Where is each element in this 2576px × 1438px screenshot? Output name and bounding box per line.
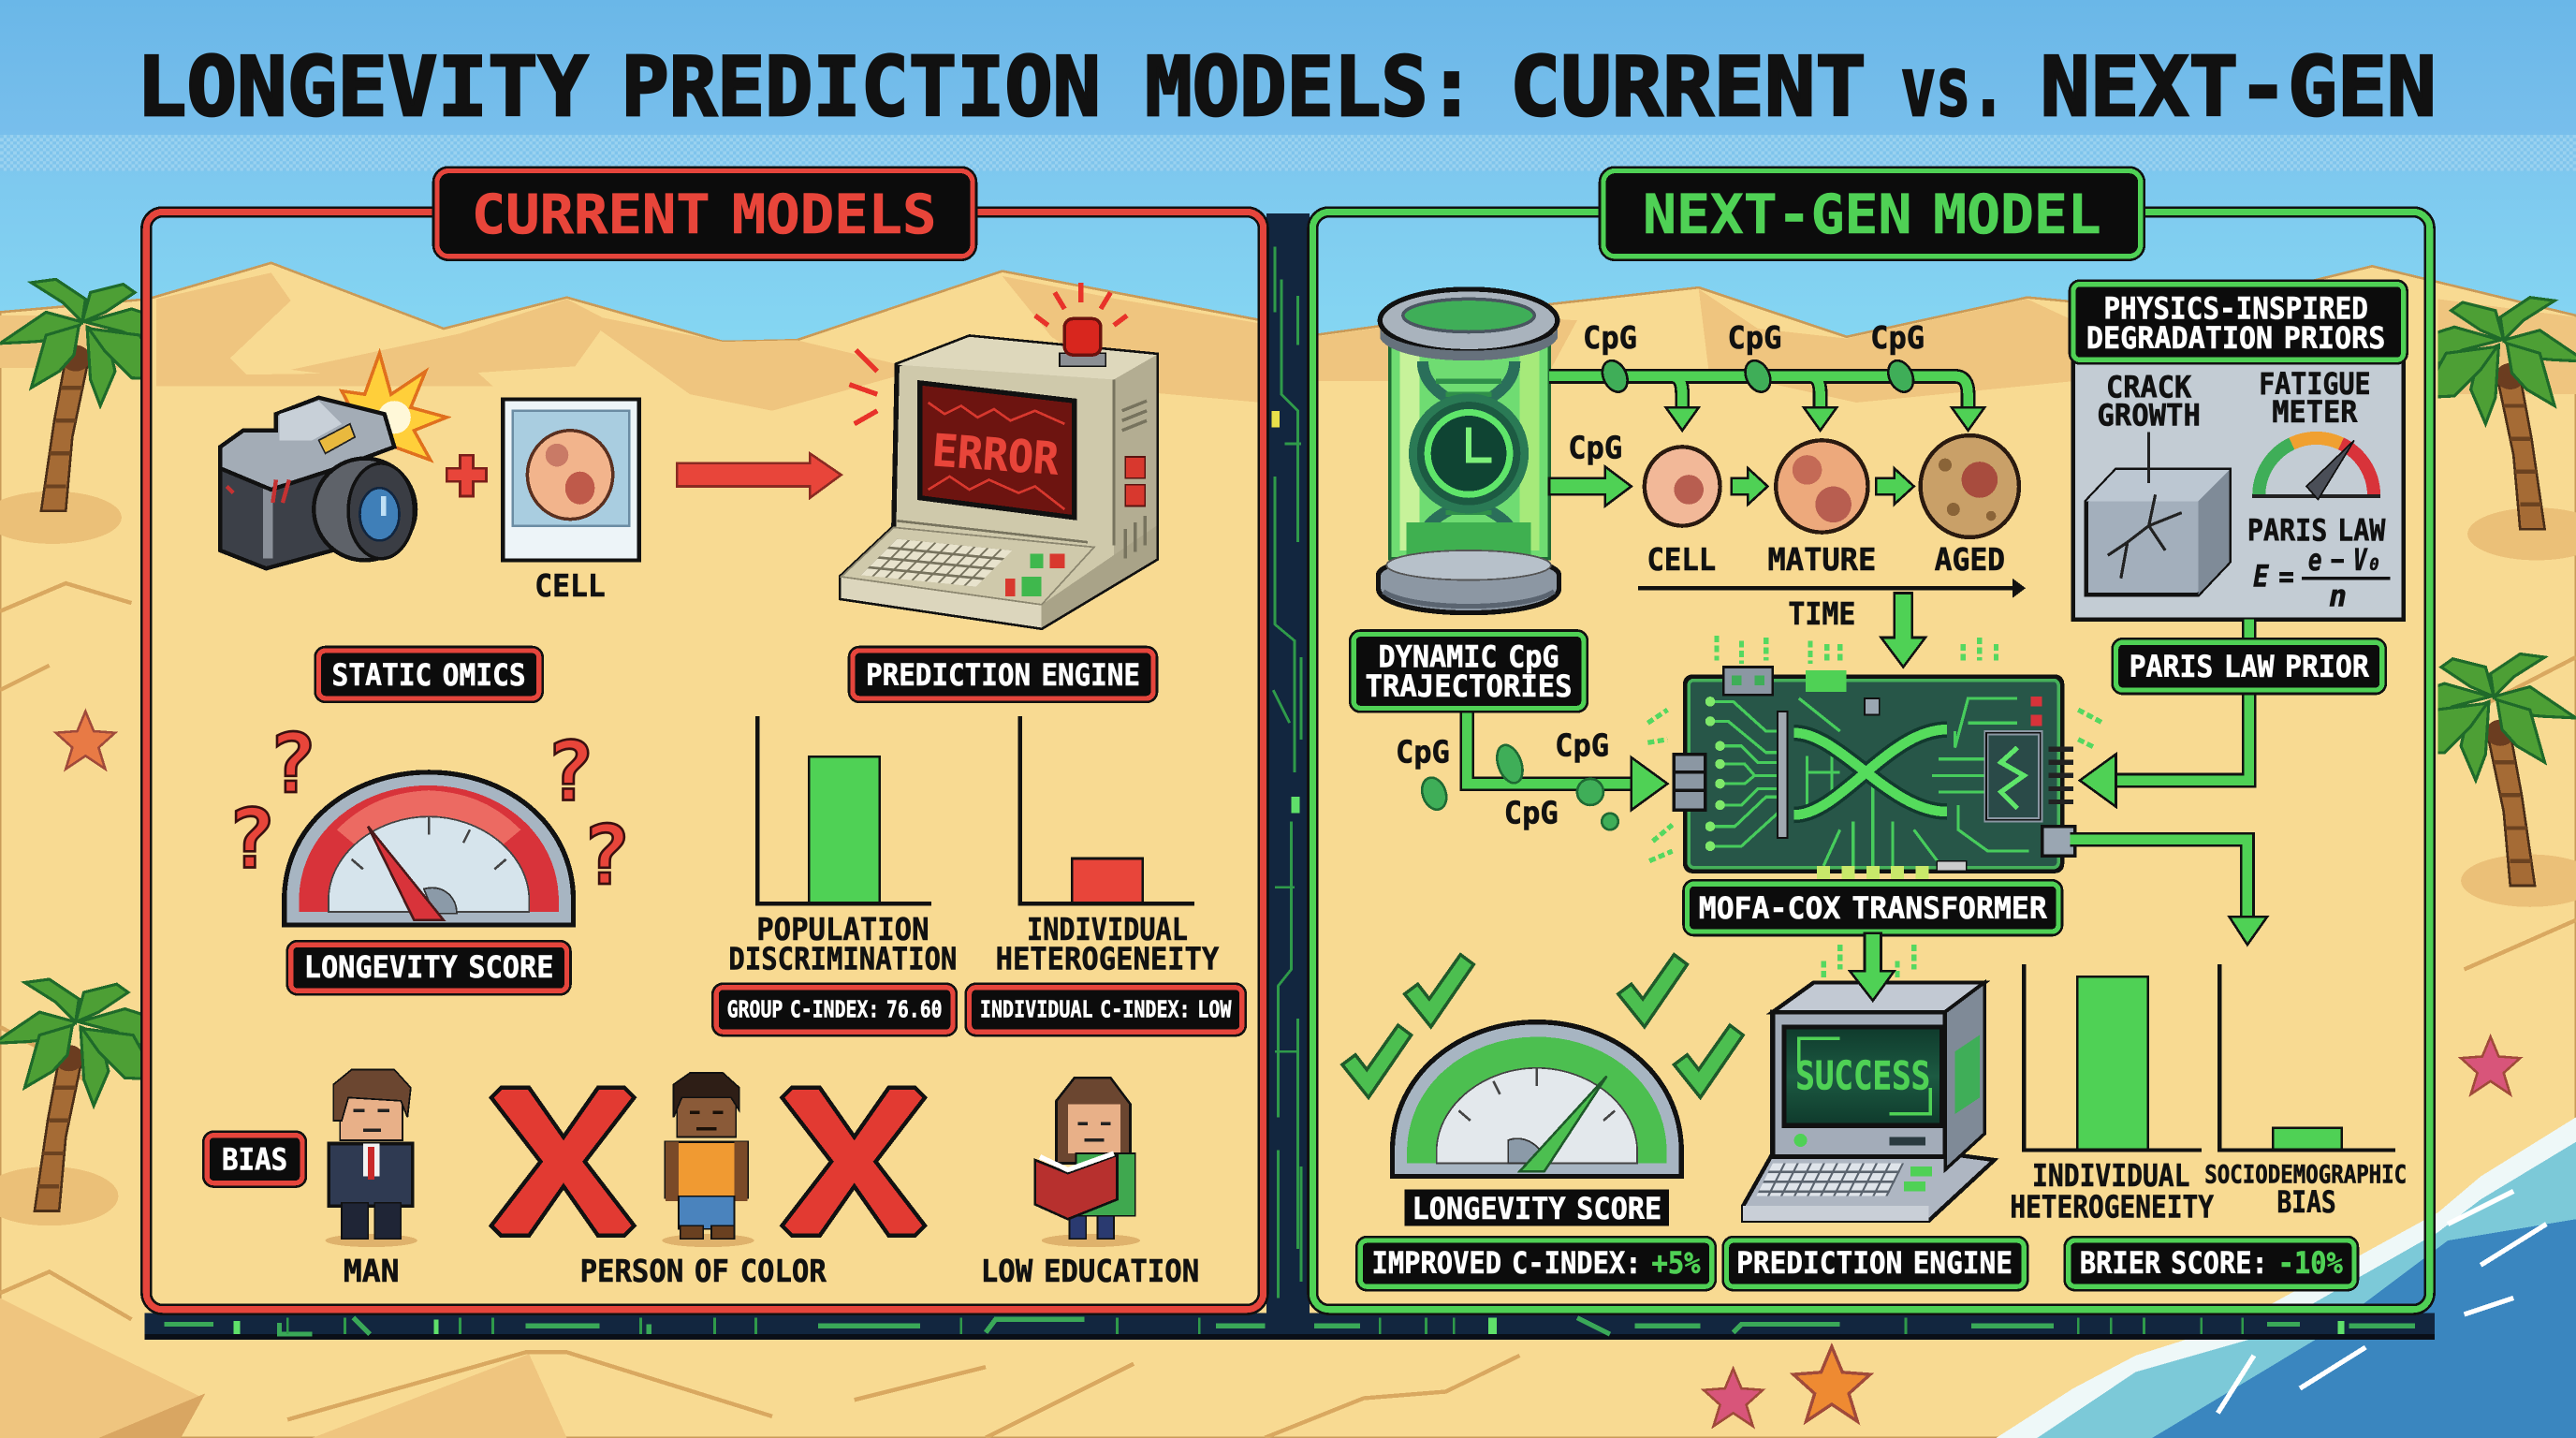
formula: paris law: E = [2253, 561, 2294, 594]
heading: next-gen model: NEXT-GEN MODEL [1643, 183, 2101, 246]
label: longevity score: LONGEVITY SCORE [304, 951, 554, 985]
bar chart: sociodemographic bias [2204, 964, 2407, 1220]
panel: physics-inspired degradation priors [2073, 285, 2404, 620]
heading: next-gen model [1603, 171, 2141, 257]
label: improved c-index [1360, 1240, 1712, 1286]
label: brier score [2069, 1240, 2354, 1286]
palm tree: lower right [2437, 653, 2576, 888]
icons: question marks: ? [546, 725, 594, 820]
label: static omics [319, 651, 539, 698]
arrow: time axis [1638, 579, 2026, 632]
icon: alarm siren [849, 283, 1127, 424]
label: group c-index [716, 988, 953, 1032]
icon: mofa-cox transformer chip [1647, 636, 2102, 977]
starfish decorations [56, 712, 2520, 1426]
icon: error computer: ERROR [930, 425, 1061, 486]
title: vs. [1901, 39, 2006, 135]
bar chart: population discrimination [728, 716, 957, 976]
arrow: dynamic cpg to transformer: CpG [1504, 794, 1559, 830]
panel: physics-inspired degradation priors: METER [2272, 396, 2358, 430]
figure: person of color [662, 1073, 754, 1247]
icon: cracked block [2086, 433, 2230, 594]
panel: physics-inspired degradation priors: FATIGUE [2259, 368, 2371, 402]
label: bias [207, 1136, 302, 1183]
label: dynamic cpg trajectories: TRAJECTORIES [1365, 670, 1573, 704]
bar chart: individual heterogeneity improved: HETEROGENEITY [2010, 1188, 2214, 1225]
bar chart: individual heterogeneity: INDIVIDUAL [1027, 911, 1188, 947]
icons: question marks: ? [227, 792, 276, 888]
panel: current models [146, 171, 1264, 1310]
circuit strip between and under panels [145, 213, 2435, 1340]
arrow: transformer to bias chart [2070, 840, 2267, 945]
icons: question marks: ? [581, 808, 631, 903]
label: mofa-cox transformer: MOFA-COX TRANSFORMER [1699, 892, 2048, 926]
bar chart: population discrimination: POPULATION [756, 911, 929, 947]
label: prediction engine: PREDICTION ENGINE [1736, 1247, 2012, 1281]
figure: low education reader [1035, 1078, 1140, 1247]
heading: current models [437, 171, 973, 257]
icon: red x two [782, 1088, 925, 1236]
palm tree: upper right [2437, 296, 2576, 530]
heading: current models: CURRENT MODELS [472, 183, 936, 246]
arrows: cpg timeline with branches: CpG [1727, 319, 1781, 356]
chart: improved longevity gauge [1342, 955, 1743, 1177]
icon: cell photo card [503, 399, 639, 560]
bar chart: individual heterogeneity: HETEROGENEITY [996, 940, 1219, 976]
icon: camera with flash [220, 353, 446, 568]
label: paris law prior [2116, 642, 2382, 690]
icons: cell aging stages: CELL [1647, 541, 1716, 578]
label: group c-index: GROUP C-INDEX: 76.60 [727, 995, 943, 1022]
bar chart: sociodemographic bias: BIAS [2277, 1186, 2336, 1220]
panel: physics-inspired degradation priors: DEGRADATION PRIORS [2086, 322, 2385, 356]
title: NEXT-GEN [2041, 39, 2437, 135]
formula: paris law [2253, 544, 2391, 614]
arrow: to prediction engine [677, 453, 842, 498]
icons: cell aging stages: MATURE [1767, 541, 1876, 578]
arrows: cpg timeline with branches: CpG [1583, 319, 1637, 356]
label: static omics: STATIC OMICS [332, 659, 526, 693]
panel: physics-inspired degradation priors: PHYSICS-INSPIRED [2103, 292, 2368, 326]
bar chart: individual heterogeneity improved: INDIVIDUAL [2032, 1157, 2190, 1194]
label: improved c-index: IMPROVED C-INDEX: +5% [1372, 1247, 1701, 1281]
panel: next-gen model [1312, 171, 2430, 1310]
icon: success computer [1743, 983, 1995, 1221]
icon: red x one [491, 1088, 634, 1236]
title: LONGEVITY [137, 39, 589, 135]
label: dynamic cpg trajectories [1354, 634, 1584, 708]
arrow: down to transformer [1881, 594, 1925, 668]
icons: cell aging stages: AGED [1935, 541, 2005, 578]
icons: question marks [227, 716, 631, 903]
text: man: MAN [344, 1253, 400, 1289]
chart: uncertain longevity gauge [227, 716, 631, 925]
arrow: dynamic cpg to transformer: CpG [1555, 726, 1609, 763]
palm tree: upper left [0, 278, 140, 512]
arrow: time axis: TIME [1788, 595, 1855, 632]
bar chart: individual heterogeneity [996, 716, 1219, 976]
background: dithered horizon band [0, 135, 2576, 171]
arrows: cpg timeline with branches [1549, 319, 1984, 506]
title: MODELS: [1145, 39, 1475, 135]
text: low education: LOW EDUCATION [981, 1253, 1199, 1289]
title: CURRENT [1510, 39, 1866, 135]
formula: paris law: n [2329, 580, 2347, 614]
label: mofa-cox transformer [1687, 884, 2058, 932]
background: sky [0, 0, 2576, 361]
label: brier score: BRIER SCORE: -10% [2080, 1247, 2343, 1281]
palm tree: lower left [0, 977, 140, 1212]
bar chart: individual heterogeneity improved [2010, 964, 2214, 1225]
icons: question marks: ? [268, 716, 317, 812]
text: cell: CELL [534, 567, 606, 604]
icon: error computer [842, 283, 1157, 627]
panel: physics-inspired degradation priors: CRACK [2106, 372, 2191, 405]
icon: dna clock cylinder [1379, 289, 1559, 613]
panel: physics-inspired degradation priors: GROWTH [2097, 400, 2201, 433]
title [137, 39, 2437, 135]
icons: check marks [1342, 955, 1743, 1097]
figure: man [326, 1070, 417, 1247]
title: PREDICTION [621, 39, 1101, 135]
label: individual c-index: INDIVIDUAL C-INDEX: LOW [980, 995, 1232, 1022]
panel: physics-inspired degradation priors: PARIS LAW [2247, 514, 2386, 548]
icon: plus [446, 455, 487, 496]
label: prediction engine: PREDICTION ENGINE [866, 659, 1140, 693]
bar chart: population discrimination: DISCRIMINATION [728, 940, 957, 976]
label: paris law prior: PARIS LAW PRIOR [2130, 651, 2370, 684]
arrow: paris law prior to transformer [2080, 620, 2249, 807]
arrows: cpg timeline with branches: CpG [1568, 430, 1622, 466]
icon: success computer: SUCCESS [1795, 1053, 1930, 1099]
icon: fatigue meter [2252, 438, 2380, 500]
icons: cell aging stages [1645, 435, 2019, 578]
label: bias: BIAS [222, 1144, 287, 1178]
label: dynamic cpg trajectories: DYNAMIC CpG [1379, 641, 1559, 675]
label: individual c-index [970, 988, 1242, 1032]
label: longevity score: LONGEVITY SCORE [1412, 1193, 1661, 1226]
text: person of color: PERSON OF COLOR [580, 1253, 827, 1289]
label: prediction engine [853, 651, 1153, 698]
arrows: cpg timeline with branches: CpG [1870, 319, 1925, 356]
arrow: dynamic cpg to transformer: CpG [1396, 733, 1450, 770]
bar chart: sociodemographic bias: SOCIODEMOGRAPHIC [2204, 1162, 2407, 1190]
label: prediction engine [1727, 1240, 2024, 1286]
arrow: dynamic cpg to transformer [1396, 710, 1667, 830]
arrow: transformer to computer [1850, 933, 1895, 1001]
formula: paris law: e − V₀ [2308, 544, 2380, 578]
background: sea and shoreline [1996, 1117, 2576, 1438]
label: longevity score [291, 945, 567, 990]
